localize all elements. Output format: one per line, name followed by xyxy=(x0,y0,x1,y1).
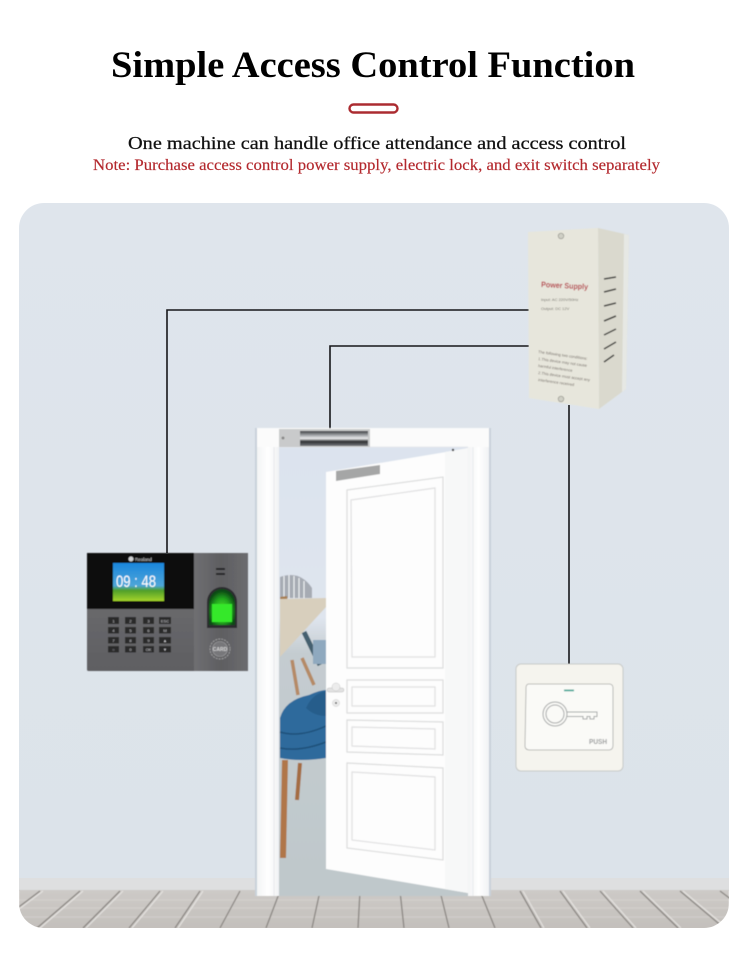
view through doorway xyxy=(279,447,469,896)
label: conditions: interference received xyxy=(538,377,575,387)
keypad xyxy=(108,617,171,652)
keypad: 3 xyxy=(147,618,150,624)
screws xyxy=(558,233,564,239)
black display bezel xyxy=(87,553,194,609)
brand xyxy=(128,556,152,562)
terminal body xyxy=(87,553,248,671)
wood floor xyxy=(0,890,750,930)
status light xyxy=(564,690,574,691)
panel: upper door panel xyxy=(347,477,443,668)
door assembly xyxy=(255,428,491,896)
keypad: ESC xyxy=(161,618,169,624)
table legs xyxy=(304,632,320,665)
power supply box xyxy=(528,228,629,409)
push button xyxy=(525,684,613,750)
card reader mark xyxy=(210,639,230,659)
label: ratings: Output: DC 12V xyxy=(541,306,570,311)
skirting xyxy=(19,878,729,891)
keypad: ▼ xyxy=(163,647,167,652)
card reader mark: CARD xyxy=(213,647,228,653)
door leaf xyxy=(326,448,468,893)
panel: lower middle door panel xyxy=(347,720,443,755)
label: conditions: 1.This device may not cause xyxy=(538,356,587,368)
label: conditions: The following two conditions: xyxy=(538,349,588,361)
cork item xyxy=(280,596,288,600)
fingerprint attendance terminal xyxy=(87,553,248,671)
keypad: ○ xyxy=(112,647,115,652)
label: conditions xyxy=(538,349,590,387)
frame shadow xyxy=(255,428,491,896)
connection wire: reader to power supply xyxy=(167,310,529,553)
title: Simple Access Control Function xyxy=(111,44,635,85)
colour screen xyxy=(113,563,164,601)
keypad: 0 xyxy=(129,647,132,652)
keypad: 8 xyxy=(129,638,132,643)
colour screen: 09 : 48 xyxy=(116,573,156,591)
right section xyxy=(194,553,248,671)
connection wire: lock to power supply xyxy=(330,346,529,430)
keypad: 6 xyxy=(147,628,150,633)
blue chair xyxy=(280,690,326,760)
wall xyxy=(19,203,729,883)
keypad: OK xyxy=(146,647,152,652)
box front xyxy=(528,228,599,409)
box side xyxy=(598,228,629,409)
label: conditions: harmful interference xyxy=(538,363,573,373)
speaker slots xyxy=(216,569,225,574)
label: power supply: Power Supply xyxy=(541,280,589,291)
keypad: M xyxy=(163,628,167,633)
connection wire: power supply to exit switch xyxy=(568,405,570,664)
hinge marks xyxy=(452,449,454,451)
back chair xyxy=(280,575,312,598)
note: Note: Purchase access control power supply, electric lock, and exit switch separately xyxy=(93,157,660,174)
heading accent: red pill xyxy=(350,104,398,112)
label: ratings: Input: AC 220V/50Hz xyxy=(541,297,578,302)
subtitle: One machine can handle office attendance and access control xyxy=(128,133,626,153)
keypad: 2 xyxy=(129,618,132,624)
panel: bottom door panel xyxy=(347,763,443,860)
keypad: ▲ xyxy=(163,638,167,643)
panel: middle door panel xyxy=(347,680,443,713)
door frame xyxy=(257,428,489,896)
door handle xyxy=(327,683,344,706)
fingerprint sensor xyxy=(207,587,237,628)
table xyxy=(280,598,326,657)
electromagnetic lock xyxy=(279,429,370,447)
label: conditions: 2.This device must accept any xyxy=(538,370,590,382)
icon: key xyxy=(543,702,597,726)
keypad: 9 xyxy=(147,638,150,643)
keypad: 5 xyxy=(129,628,132,633)
panel: room scene xyxy=(0,203,750,930)
chair legs xyxy=(283,760,285,858)
wall plate xyxy=(516,664,623,771)
push label: PUSH xyxy=(589,739,607,746)
armature plate on door xyxy=(336,465,380,481)
keypad: 4 xyxy=(112,628,115,633)
label: ratings xyxy=(541,297,578,311)
brand: Realand xyxy=(135,557,152,562)
keypad: 7 xyxy=(112,638,115,643)
vent slots xyxy=(604,277,616,362)
exit switch xyxy=(516,664,623,771)
keypad: 1 xyxy=(112,618,115,624)
